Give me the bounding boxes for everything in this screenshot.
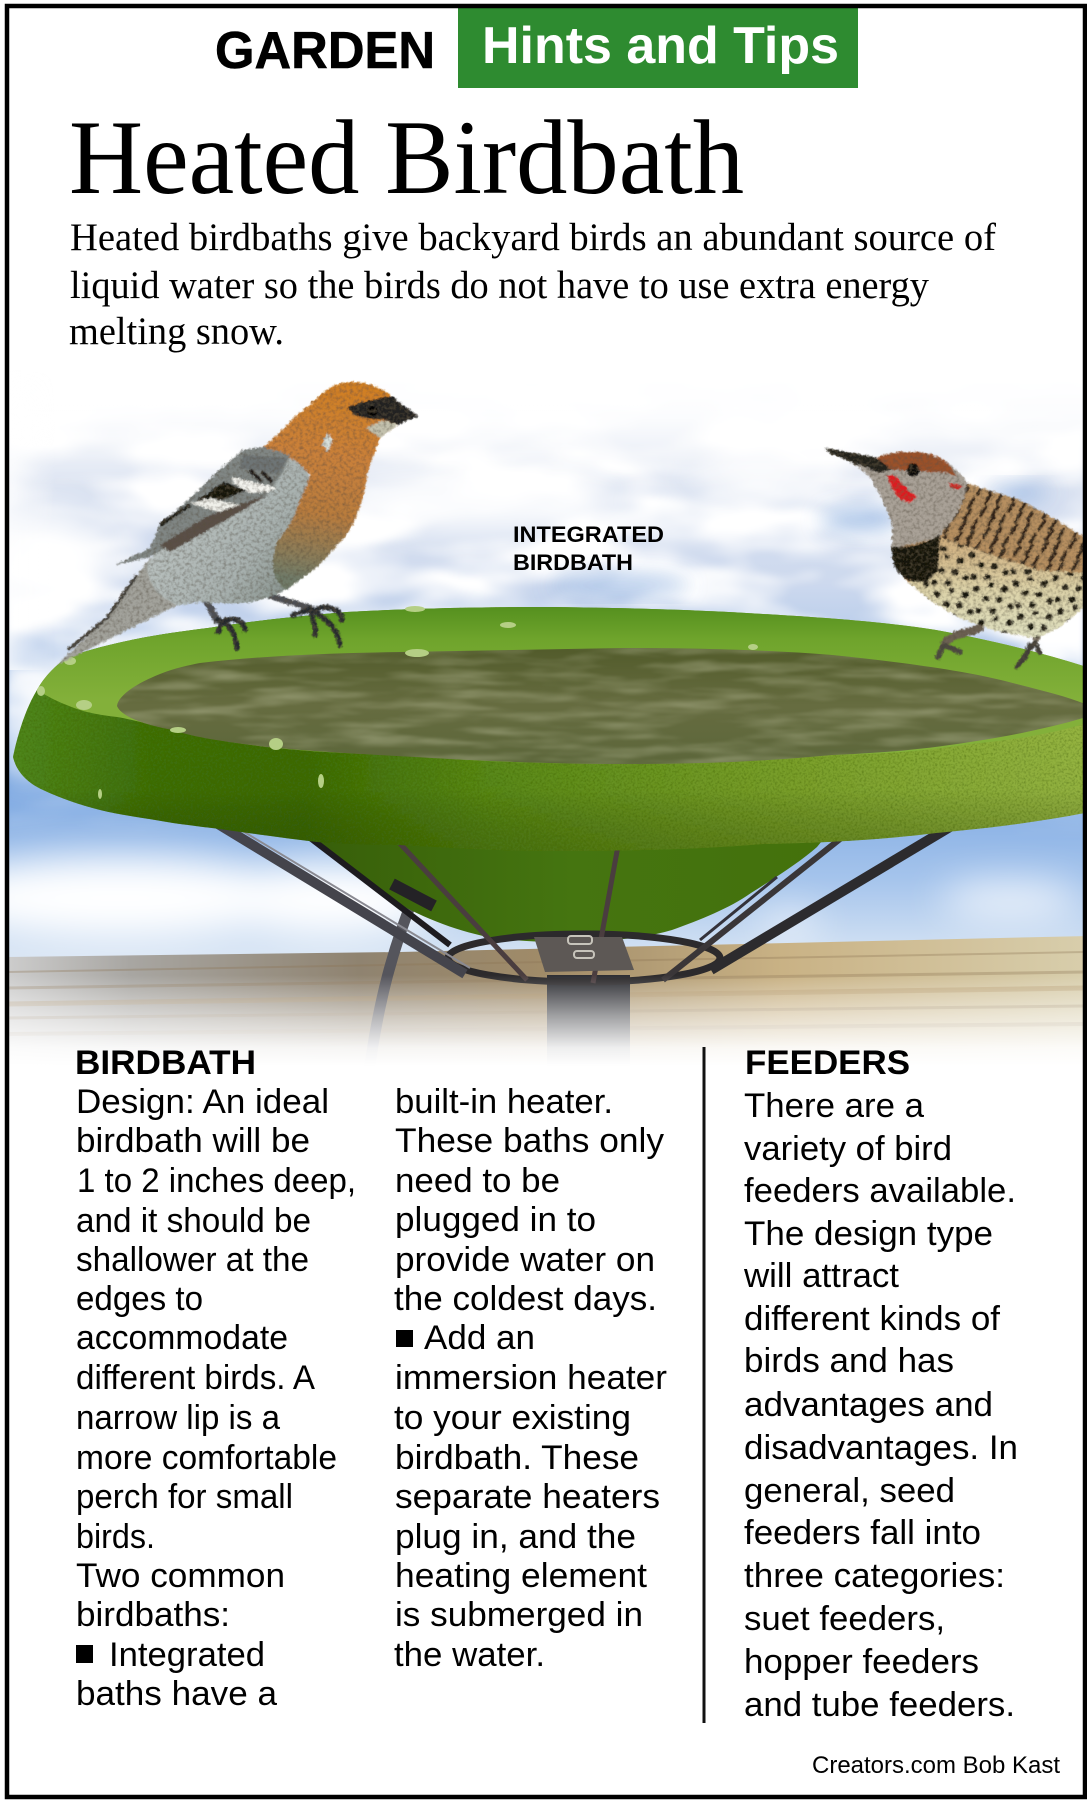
column 2: birdbath text continued: need to be bbox=[395, 1162, 560, 1200]
column 1: birdbath text: different birds. A bbox=[76, 1359, 315, 1397]
birdbath rim wall bbox=[13, 607, 1087, 851]
column 3: feeders text: FEEDERS bbox=[745, 1044, 910, 1082]
breast highlights bbox=[322, 433, 333, 452]
flicker rufous crown bbox=[877, 452, 957, 477]
column 3: feeders text: advantages and bbox=[744, 1386, 993, 1424]
column 3: feeders text bbox=[743, 1044, 1018, 1724]
column 2: birdbath text continued: to your existing bbox=[394, 1399, 631, 1437]
column 1: birdbath text: narrow lip is a bbox=[76, 1399, 281, 1437]
sky with clouds bbox=[9, 430, 1083, 957]
label: integrated birdbath: INTEGRATED bbox=[513, 522, 664, 547]
flicker belly spots bbox=[922, 537, 1083, 640]
metal stand with struts and ring bbox=[218, 824, 950, 983]
stand mounting plate bbox=[534, 936, 634, 972]
flicker red malar bbox=[887, 475, 917, 503]
label: integrated birdbath: BIRDBATH bbox=[513, 550, 633, 575]
header: green Hints and Tips banner: Hints and Tips bbox=[482, 17, 839, 75]
water drops on the rim bbox=[37, 606, 758, 799]
northern flicker bird bbox=[825, 448, 1087, 667]
flicker body bbox=[895, 460, 1084, 638]
flicker legs bbox=[938, 617, 1047, 667]
credit line: Creators.com Bob Kast bbox=[812, 1752, 1060, 1779]
bath lip top surface bbox=[37, 607, 1087, 764]
column 3: feeders text: variety of bird bbox=[744, 1130, 952, 1168]
column 2: birdbath text continued: heating element bbox=[395, 1557, 647, 1595]
column 2: birdbath text continued: birdbath. These bbox=[395, 1439, 639, 1477]
column 3: feeders text: The design type bbox=[744, 1215, 993, 1253]
column 3: feeders text: will attract bbox=[743, 1257, 899, 1295]
column 2: birdbath text continued bbox=[394, 1083, 667, 1674]
column 3: feeders text: different kinds of bbox=[744, 1300, 1000, 1338]
bird throat bbox=[366, 420, 397, 438]
title: Heated Birdbath bbox=[69, 99, 744, 216]
column 1: birdbath text: baths have a bbox=[76, 1675, 278, 1713]
label: integrated birdbath bbox=[513, 522, 664, 575]
column 2: birdbath text continued: is submerged in bbox=[395, 1596, 643, 1634]
column 1: birdbath text: Integrated bbox=[109, 1636, 265, 1674]
column 1: birdbath text: accommodate bbox=[76, 1319, 288, 1357]
column 1: birdbath text: 1 to 2 inches deep, bbox=[77, 1162, 356, 1200]
column 1: birdbath text: BIRDBATH bbox=[75, 1044, 256, 1082]
column 3: feeders text: suet feeders, bbox=[744, 1600, 945, 1638]
column 2: birdbath text continued: plug in, and the bbox=[395, 1518, 636, 1556]
pole bbox=[547, 975, 630, 1082]
column 1: birdbath text: Two common bbox=[76, 1557, 285, 1595]
intro text: liquid water so the birds do not have to use extra energy bbox=[70, 263, 929, 307]
photo illustration: birdbath scene bbox=[0, 370, 1087, 1082]
column 1: birdbath text: more comfortable bbox=[76, 1439, 337, 1477]
column 2: birdbath text continued: immersion heater bbox=[395, 1359, 667, 1397]
column 3: feeders text: birds and has bbox=[744, 1342, 954, 1380]
column divider bbox=[702, 1047, 706, 1723]
column 3: feeders text: disadvantages. In bbox=[744, 1429, 1018, 1467]
column 2: birdbath text continued: the water. bbox=[394, 1636, 545, 1674]
column 1: birdbath text bbox=[75, 1044, 356, 1713]
column 3: feeders text: and tube feeders. bbox=[744, 1686, 1015, 1724]
column 3: feeders text: three categories: bbox=[744, 1557, 1005, 1595]
column 3: feeders text: feeders fall into bbox=[744, 1514, 981, 1552]
column 2: birdbath text continued: separate heaters bbox=[395, 1478, 660, 1516]
column 2: birdbath text continued: These baths only bbox=[395, 1122, 665, 1160]
bird tail bbox=[57, 558, 190, 665]
column 3: feeders text: general, seed bbox=[744, 1472, 955, 1510]
flicker barred back bbox=[942, 482, 1083, 573]
header: GARDEN label: GARDEN bbox=[215, 22, 435, 80]
bird legs and claws bbox=[200, 590, 342, 648]
flicker pale belly bbox=[908, 537, 1084, 638]
column 1: birdbath text: Design: An ideal bbox=[76, 1083, 329, 1121]
bowl cone underside bbox=[320, 842, 821, 942]
column 2: birdbath text continued: built-in heater. bbox=[395, 1083, 613, 1121]
intro text: Heated birdbaths give backyard birds an abundant source of bbox=[70, 215, 997, 259]
column 1: birdbath text: and it should be bbox=[76, 1202, 311, 1240]
white fade into text area bbox=[8, 975, 1084, 1082]
column 2: birdbath text continued: the coldest days. bbox=[394, 1280, 657, 1318]
column 3: feeders text: hopper feeders bbox=[744, 1643, 979, 1681]
flicker black bib bbox=[892, 535, 940, 582]
intro text bbox=[69, 215, 997, 353]
bird wing bbox=[115, 447, 290, 565]
flicker beak bbox=[825, 448, 892, 473]
column 3: feeders text: There are a bbox=[744, 1087, 925, 1125]
bird face mask and beak bbox=[347, 396, 418, 425]
intro text: melting snow. bbox=[69, 309, 284, 353]
column 1: birdbath text: edges to bbox=[76, 1280, 203, 1318]
column 1: birdbath text: shallower at the bbox=[76, 1241, 309, 1279]
wing stripes bbox=[160, 470, 277, 525]
column 2: birdbath text continued: plugged in to bbox=[395, 1201, 596, 1239]
column 2: birdbath text continued: Add an bbox=[424, 1319, 535, 1357]
column 1: birdbath text: birdbaths: bbox=[76, 1596, 230, 1634]
power cord bbox=[368, 891, 416, 1080]
flicker gray head bbox=[853, 452, 967, 549]
column 3: feeders text: feeders available. bbox=[744, 1172, 1016, 1210]
column 1: birdbath text: birds. bbox=[76, 1518, 155, 1556]
bird gray body bbox=[147, 446, 312, 605]
pine grosbeak bird bbox=[57, 382, 418, 665]
header: green Hints and Tips banner bbox=[458, 8, 858, 88]
bird orange head and breast bbox=[263, 382, 397, 590]
column 2: birdbath text continued: provide water on bbox=[395, 1241, 655, 1279]
water surface bbox=[117, 648, 1083, 764]
top fade of the sky bbox=[8, 370, 1084, 490]
column 1: birdbath text: birdbath will be bbox=[76, 1122, 310, 1160]
wooden deck rail bbox=[9, 936, 1083, 1053]
column 1: birdbath text: perch for small bbox=[76, 1478, 293, 1516]
